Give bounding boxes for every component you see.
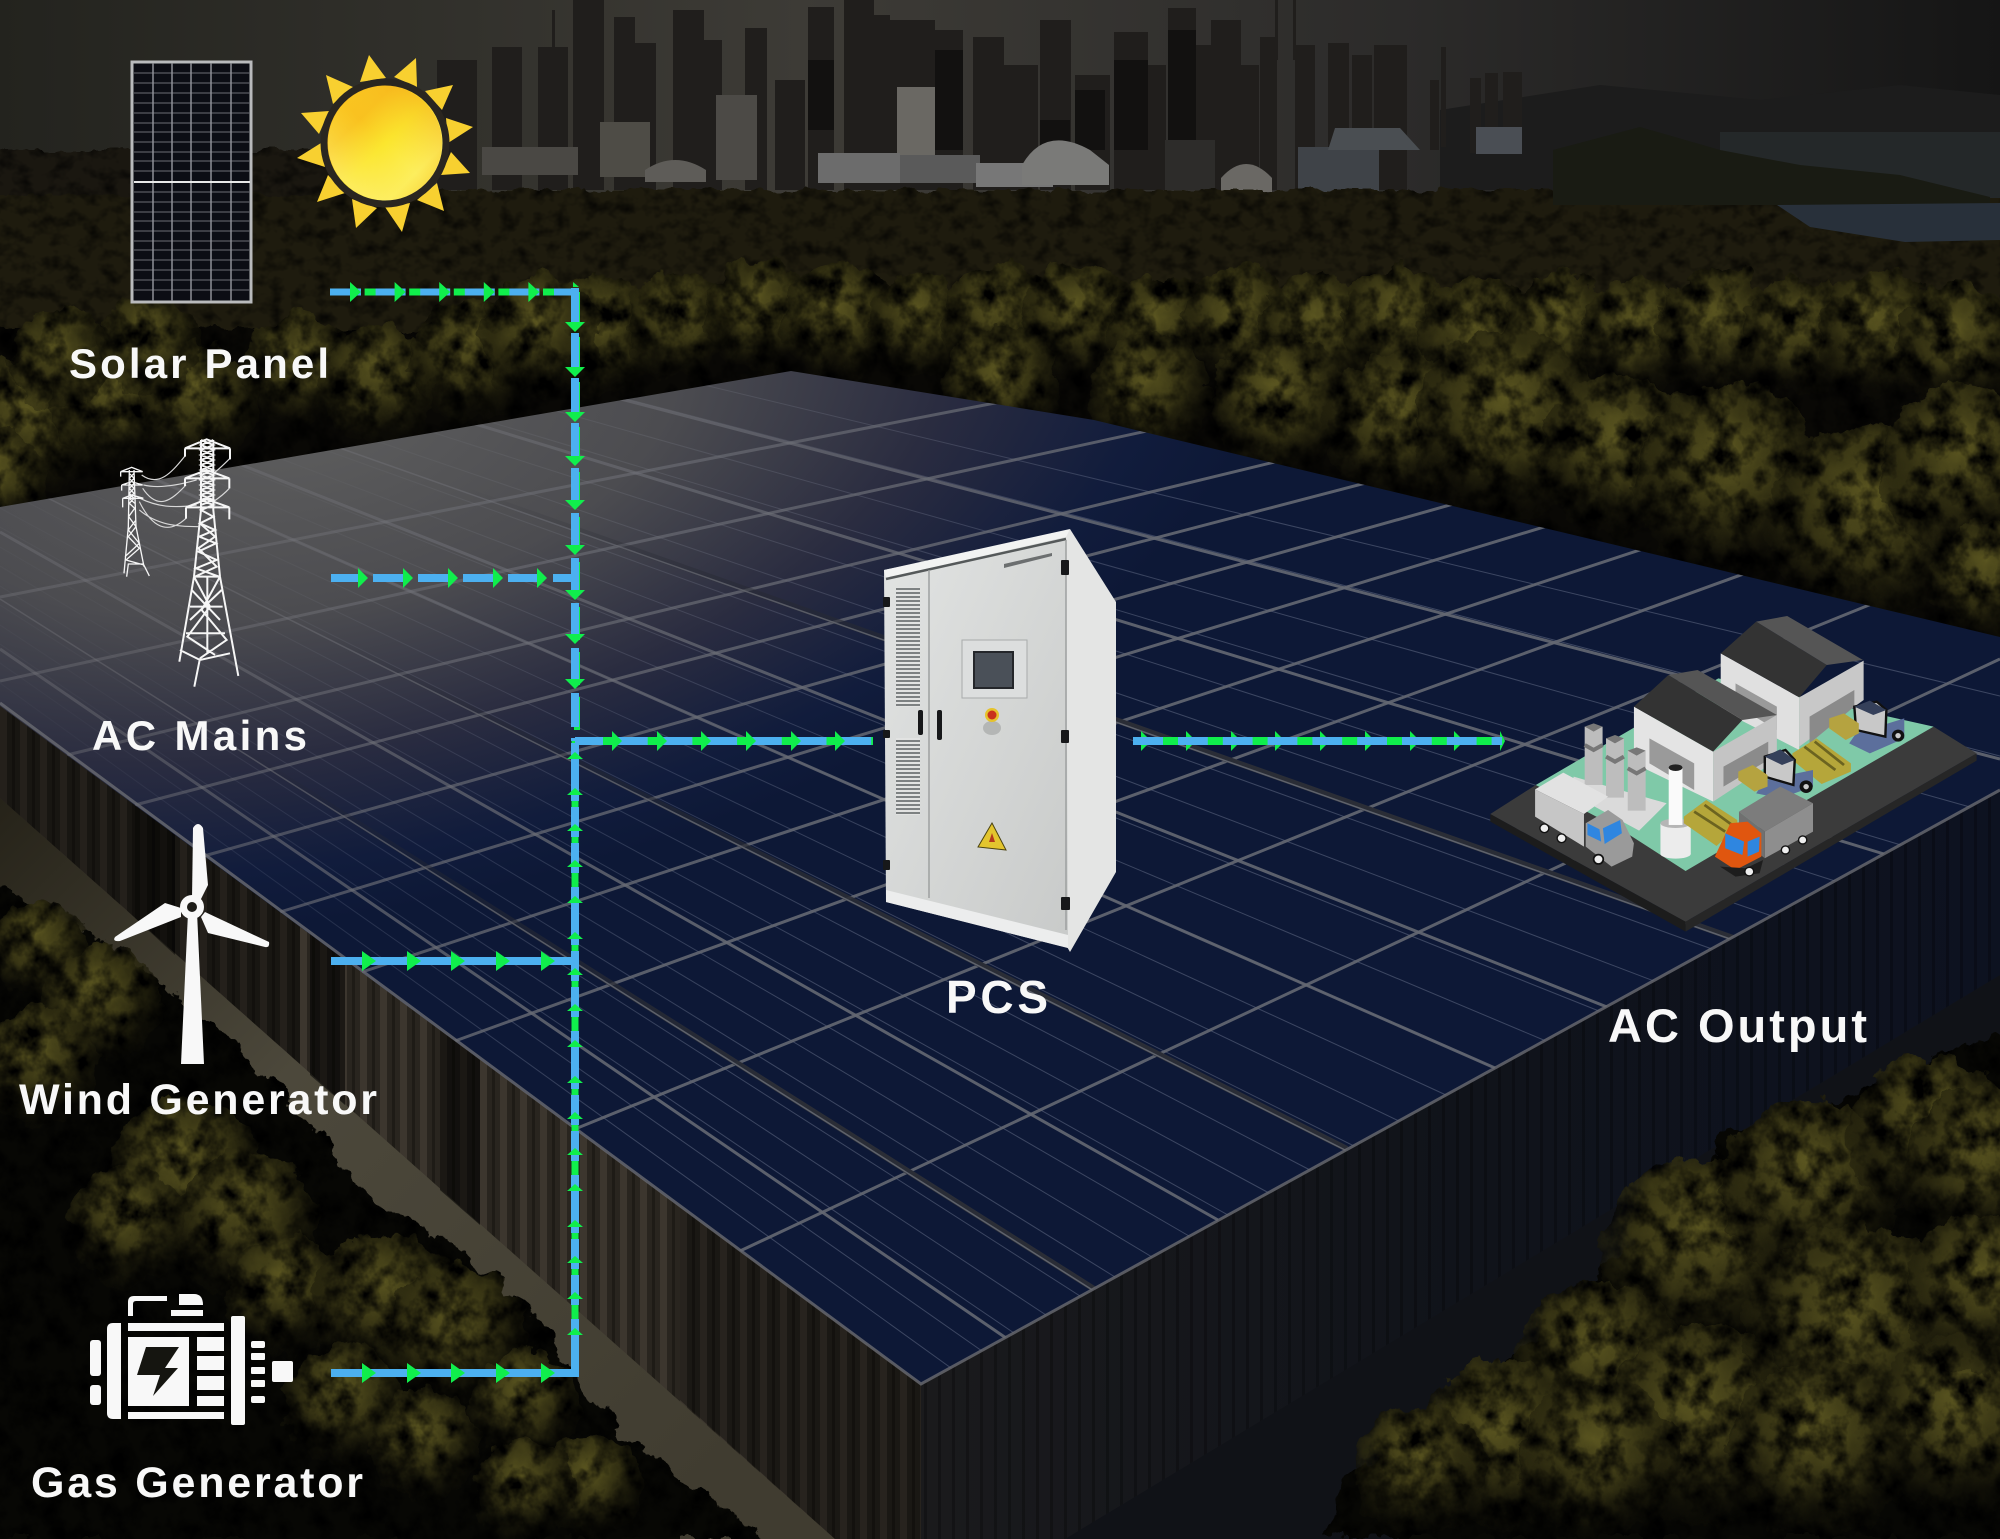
pallets [1684,738,1851,846]
arrow flow: bus to PCS [575,731,873,751]
building: left wall [0,700,921,1539]
icon: sun [297,55,473,232]
forklift front [1738,749,1813,798]
background: lower left trees [0,870,770,1539]
arrow flow: upper bus down to junction [565,288,585,741]
arrow flow: solar panel to bus [330,282,579,302]
touch screen [962,640,1027,698]
label: AC Output: AC Output [1608,999,1867,1052]
icon: factory AC output [1490,616,1977,932]
background: ground right of the building [1000,960,2000,1539]
background: distant hills [1440,85,2000,190]
background: tree line behind the roof [0,260,2000,720]
background: lower right trees [1320,1020,2000,1539]
background: right hill and water [1553,127,2000,242]
icon: wind turbine [114,824,269,1064]
label: PCS: PCS [946,971,1048,1023]
building: front right wall [921,790,2000,1539]
label: Wind Generator: Wind Generator [19,1076,377,1124]
large tower [179,439,238,687]
arrow flow: lower bus up to junction [567,741,583,1377]
icon: transmission towers [121,439,238,687]
door handles and hinges [883,553,1070,910]
small tower [121,467,149,577]
icon: solar panel [132,62,251,302]
forklift rear [1829,701,1904,753]
arrow flow: PCS to AC output [1133,731,1505,751]
arrow flow: AC mains to bus [331,568,575,588]
label: Gas Generator: Gas Generator [31,1459,363,1507]
gray and orange truck [1715,787,1813,877]
icon: PCS cabinet [883,529,1116,952]
background: road [0,780,840,1539]
building: solar roof [0,371,2000,1386]
label: Solar Panel: Solar Panel [69,340,329,387]
icon: gas generator [90,1294,293,1425]
background: mid forest band [0,150,2000,390]
label: AC Mains: AC Mains [92,712,307,759]
front building [1634,670,1777,802]
white truck [1535,773,1634,867]
ventilation grilles [896,587,920,815]
chimneys and plant [1570,723,1691,859]
arrow flow: gas generator to bus [331,1363,578,1383]
base plate [1490,678,1977,932]
background: city skyline [251,0,1522,192]
warning label [978,823,1006,850]
arrow flow: wind generator to bus [331,951,575,971]
wires [139,456,230,527]
background: sky [0,0,2000,300]
emergency stop [983,708,1001,735]
rear building [1721,616,1864,750]
